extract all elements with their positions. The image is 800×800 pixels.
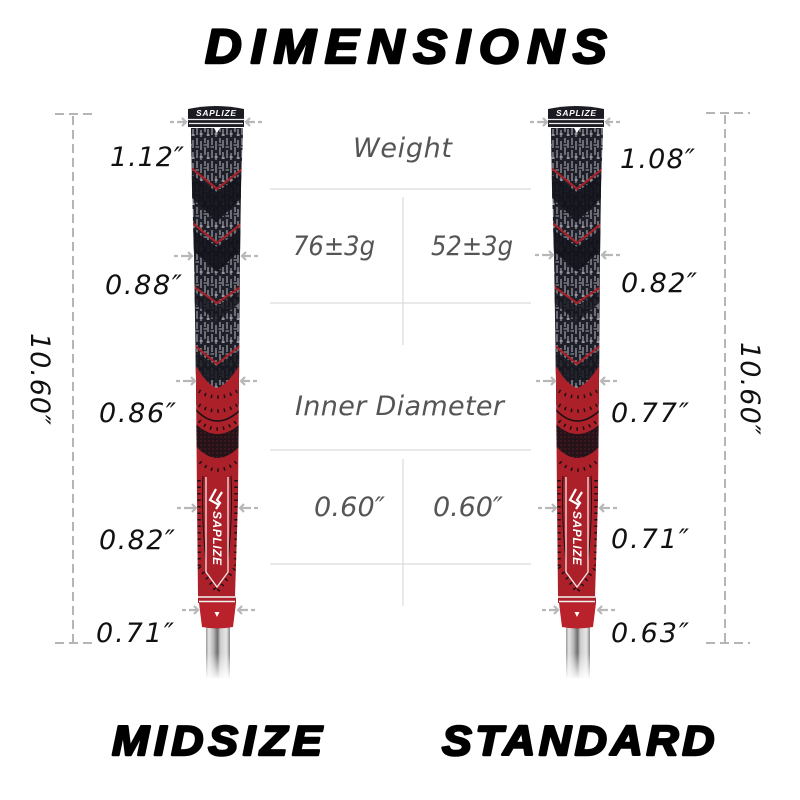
standard grip: [548, 106, 604, 678]
standard diameter labels: 1.08″: [620, 144, 695, 175]
heading: weight: Weight: [353, 133, 453, 164]
steel shaft: [564, 626, 592, 680]
logo panel: SAPLIZE: [570, 511, 584, 566]
value: standard inner diameter: 0.60″: [433, 492, 503, 523]
midsize diameter labels: 0.71″: [96, 618, 174, 649]
standard diameter labels: 0.71″: [611, 524, 689, 555]
value: standard weight: 52±3g: [431, 231, 513, 262]
bottom cap: [199, 603, 236, 628]
steel shaft: [204, 626, 232, 680]
top cap: SAPLIZE: [556, 108, 596, 118]
top cap: [548, 106, 604, 133]
standard diameter labels: [611, 144, 697, 649]
white bands: [198, 596, 236, 603]
midsize diameter labels: 1.12″: [110, 142, 184, 173]
value: midsize weight: 76±3g: [293, 231, 375, 262]
caption: standard: STANDARD: [442, 718, 714, 765]
midsize grip: [188, 106, 244, 678]
top cap: SAPLIZE: [196, 108, 236, 118]
grip body: [551, 128, 603, 596]
white bands: [558, 596, 596, 603]
dimension line: standard length: [706, 113, 750, 643]
standard width arrows: [530, 118, 620, 614]
caption: midsize: MIDSIZE: [112, 718, 323, 765]
standard diameter labels: 0.82″: [621, 268, 697, 299]
logo panel: [566, 477, 588, 587]
table dividers: [270, 189, 531, 606]
value: midsize inner diameter: 0.60″: [314, 492, 385, 523]
grip body: [191, 128, 243, 596]
midsize diameter labels: 0.88″: [105, 270, 182, 301]
logo panel: [206, 477, 228, 587]
length label: midsize: 10.60″: [24, 333, 55, 425]
logo panel: SAPLIZE: [210, 511, 224, 566]
standard diameter labels: 0.63″: [611, 618, 689, 649]
midsize diameter labels: [96, 142, 184, 649]
midsize width arrows: [170, 118, 262, 614]
midsize diameter labels: 0.82″: [99, 525, 175, 556]
heading: inner diameter: Inner Diameter: [295, 391, 506, 422]
title: DIMENSIONS: [205, 20, 607, 74]
midsize diameter labels: 0.86″: [99, 398, 176, 429]
length label: standard: 10.60″: [734, 342, 765, 435]
standard diameter labels: 0.77″: [611, 398, 689, 429]
dimension line: midsize length: [55, 114, 97, 643]
top cap: [188, 106, 244, 133]
bottom cap: [559, 603, 596, 628]
